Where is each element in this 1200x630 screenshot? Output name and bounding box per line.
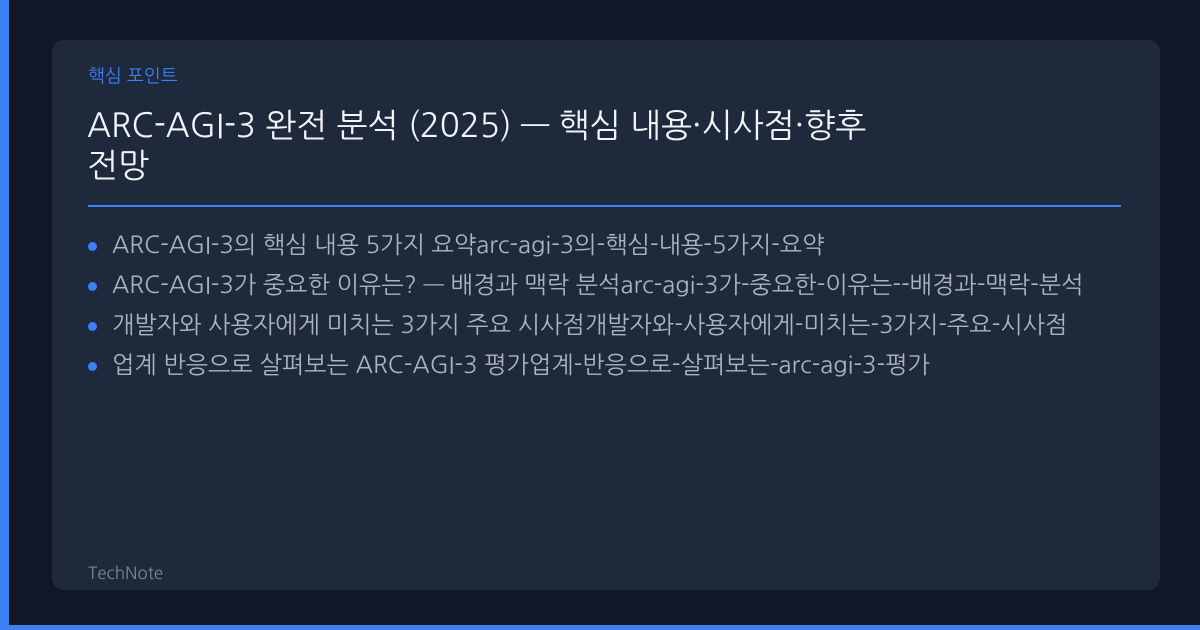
- title: 전망: [87, 149, 149, 182]
- bullet 1: ARC-AGI-3의 핵심 내용 5가지 요약arc-agi-3의-핵심-내용-5가지-요약: [112, 234, 824, 257]
- bullet list: [88, 233, 1083, 377]
- bullet 2: ARC-AGI-3가 중요한 이유는? — 배경과 맥락 분석arc-agi-3가-중요한-이유는--배경과-맥락-분석: [112, 274, 1083, 297]
- title: [87, 109, 866, 182]
- title: ARC-AGI-3 완전 분석 (2025) — 핵심 내용·시사점·향후: [87, 109, 866, 142]
- bullet 3: 개발자와 사용자에게 미치는 3가지 주요 시사점개발자와-사용자에게-미치는-3가지-주요-시사점: [112, 314, 1067, 337]
- footer brand: TechNote: [88, 565, 163, 582]
- kicker label: 핵심 포인트: [88, 67, 178, 85]
- bullet 4: 업계 반응으로 살펴보는 ARC-AGI-3 평가업계-반응으로-살펴보는-arc-agi-3-평가: [112, 354, 930, 377]
